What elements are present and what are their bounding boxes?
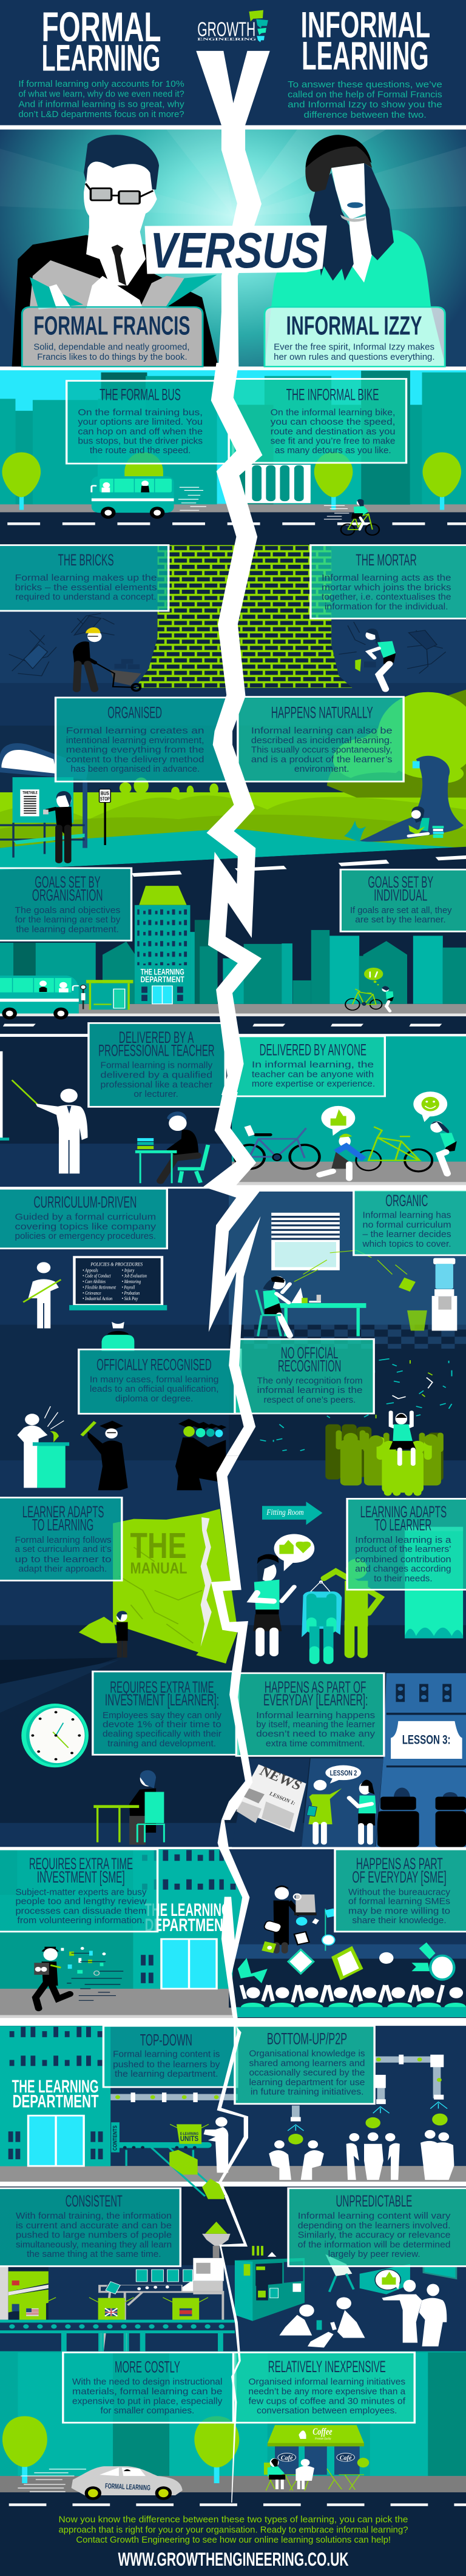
- panel: curriculum-driven: [0, 1189, 167, 1249]
- the learning department building: DEPARTMENT: [141, 975, 184, 985]
- lesson 3 cinema: [376, 1673, 466, 1847]
- panel: curriculum-driven: policies or emergency procedures.: [15, 1231, 156, 1241]
- panel: bottom-up P2P: Organisational knowledge is: [249, 2048, 365, 2058]
- running expert: [34, 1947, 123, 2008]
- panel: requires extra time investment SME: people too and lengthy review: [15, 1896, 147, 1906]
- panel: bottom-up P2P: shared among learners and: [249, 2058, 365, 2068]
- the manual rock: THE: [130, 1526, 187, 1566]
- panel: happens as part of everyday learner: [236, 1673, 384, 1756]
- intro text right: and Informal Izzy to show you the: [288, 99, 442, 110]
- learner at desk: [93, 1770, 164, 1845]
- closing text: Now you know the difference between these two types of learning, you can pick the: [58, 2515, 408, 2524]
- confetti: [260, 1359, 451, 1451]
- panel: the informal bike: see fit and you’re free to make: [271, 436, 395, 446]
- panel: learner adapts to learning: TO LEARNING: [32, 1516, 93, 1534]
- closing text: approach that is right for you or your organisation. Ready to embrace informal learning?: [58, 2525, 408, 2535]
- panel: relatively inexpensive: needn’t be any more expensive than a: [248, 2386, 406, 2396]
- panel: requires extra time investment SME: from volunteering information.: [17, 1915, 145, 1926]
- panel: more costly: expensive to put in place, especially: [72, 2396, 223, 2406]
- panel: organised: has been organised in advance.: [71, 764, 200, 774]
- panel: goals set by organisation: the learning department.: [16, 924, 119, 934]
- intro text left: And if informal learning is so great, why: [18, 99, 184, 109]
- teacher with pointer and blackboard: • Code of Conduct: [83, 1273, 111, 1278]
- panel: happens naturally: [238, 697, 404, 781]
- panel: requires extra time investment learner: Employees say they can only: [103, 1710, 221, 1720]
- toy shelf: [235, 2246, 305, 2321]
- panel: delivered by anyone: [235, 1036, 385, 1096]
- formal learning car: FORMAL LEARNING: [105, 2482, 150, 2492]
- panel: learning adapts to learner: Informal learning is a: [355, 1535, 451, 1545]
- panel: consistent: is current and accurate and can be: [16, 2220, 172, 2231]
- teacher with pointer and blackboard: • Probation: [122, 1290, 140, 1296]
- panel: relatively inexpensive: [233, 2352, 414, 2423]
- stock shelves: [0, 2267, 49, 2320]
- panel: the formal bus: On the formal training bus,: [78, 407, 203, 417]
- panel: Formal Francis: FORMAL FRANCIS: [33, 311, 190, 340]
- panel: requires extra time investment SME: Subject-matter experts are busy: [15, 1887, 147, 1897]
- conveyor e-learning units: E-LEARNING: [180, 2132, 198, 2136]
- conveyor e-learning units: CONTENTS: [112, 2125, 118, 2151]
- panel: organic: Informal learning has: [363, 1210, 451, 1220]
- logo: Growth Engineering: [197, 10, 268, 42]
- peers in discussion: [279, 2270, 447, 2348]
- bus shelter and bus: [0, 976, 133, 1019]
- panel: Formal Francis: Francis likes to do things by the book.: [37, 352, 187, 362]
- worker with wheelbarrow: [73, 627, 141, 691]
- peers sharing knowledge: [269, 2102, 454, 2180]
- panel: officially recognised: OFFICIALLY RECOGNISED: [96, 1357, 212, 1374]
- bike rider: [324, 499, 379, 535]
- panel: the mortar: information for the individual.: [325, 601, 448, 612]
- teacher with pointer and blackboard: • Payroll: [122, 1285, 135, 1290]
- panel: officially recognised: [79, 1349, 241, 1414]
- panel: relatively inexpensive: few cups of coffee and 30 minutes of: [248, 2396, 405, 2406]
- panel: learner adapts to learning: up to the learner to: [15, 1554, 112, 1564]
- seated audience: [241, 1985, 466, 2007]
- lesson 2 room: LESSON 2: [330, 1769, 357, 1777]
- panel: learner adapts to learning: LEARNER ADAPTS: [22, 1503, 104, 1521]
- panel: delivered by a professional teacher: [89, 1023, 225, 1107]
- intro text right: [288, 79, 442, 120]
- panel: organised: ORGANISED: [107, 704, 162, 722]
- intro text right: called on the help of Formal Francis: [288, 89, 442, 99]
- panel: happens as part of everyday learner: doesn’t need to make any: [256, 1728, 376, 1739]
- title: Formal Learning: FORMAL: [42, 4, 161, 50]
- newspaper: [235, 1764, 306, 1832]
- panel: Informal Izzy: [265, 307, 445, 366]
- panel: consistent: simultaneously, meaning they all learn: [16, 2239, 172, 2250]
- panel: happens as part of everyday SME: share their knowledge.: [352, 1915, 447, 1926]
- panel: more costly: With the need to design instructional: [72, 2376, 222, 2387]
- panel: Formal Francis: [22, 307, 203, 366]
- panel: happens naturally: and is a product of the learner’s: [251, 754, 393, 764]
- panel: the informal bike: you can choose the speed,: [271, 417, 395, 427]
- panel: top-down: [103, 2026, 237, 2087]
- panel: happens as part of everyday SME: may be more willing to: [348, 1906, 450, 1916]
- panel: goals set by organisation: for the learning are set by: [15, 914, 121, 925]
- teacher with pointer and blackboard: • Job Evaluation: [122, 1273, 147, 1278]
- person mending bike: [345, 968, 394, 1011]
- fitting room arrow: Fitting Room: [266, 1508, 304, 1517]
- coffee shop: Café: [281, 2454, 293, 2461]
- section: consistent, costs, footer: [0, 2188, 466, 2570]
- panel: learner adapts to learning: [0, 1497, 122, 1580]
- closing text: Contact Growth Engineering to see how our online learning solutions can help!: [76, 2535, 391, 2545]
- panel: delivered by anyone: In informal learning, the: [252, 1059, 374, 1070]
- panel: learner adapts to learning: a set curriculum and it’s: [15, 1544, 112, 1554]
- panel: unpredictable: largely by peer review.: [328, 2249, 420, 2259]
- panel: the informal bike: route and destination as you: [271, 427, 395, 437]
- panel: the bricks: required to understand a concept.: [15, 592, 157, 602]
- panel: no official recognition: NO OFFICIAL: [281, 1344, 338, 1362]
- mannequin and clothes: [302, 1559, 380, 1660]
- panel: goals set by organisation: GOALS SET BY: [35, 874, 101, 891]
- panel: goals set by organisation: [0, 868, 131, 940]
- illustration: Formal Francis: [12, 135, 218, 366]
- the manual rock: MANUAL: [130, 1560, 187, 1577]
- panel: requires extra time investment learner: dealing specifically with their: [103, 1728, 221, 1739]
- panel: delivered by anyone: teacher can be anyone with: [252, 1069, 374, 1079]
- panel: organised: content to the delivery method: [66, 754, 204, 764]
- central crack: [196, 51, 270, 2503]
- panel: consistent: CONSISTENT: [66, 2192, 123, 2210]
- road markings: [7, 521, 466, 527]
- section: organised, goals: [0, 690, 466, 1027]
- panel: more costly: MORE COSTLY: [115, 2358, 180, 2376]
- panel: delivered by a professional teacher: Formal learning is normally: [101, 1060, 213, 1070]
- wall cracks: [9, 613, 446, 676]
- panel: relatively inexpensive: Organised informal learning initiatives: [248, 2376, 405, 2387]
- panel: unpredictable: [288, 2188, 466, 2266]
- title: Informal Learning: [301, 5, 430, 78]
- fitting room curtain: [405, 1527, 463, 1639]
- trees: [2, 453, 461, 510]
- panel: organic: [354, 1190, 466, 1255]
- panel: no official recognition: The only recognition from: [257, 1375, 363, 1386]
- panel: delivered by a professional teacher: professional like a teacher: [101, 1079, 213, 1090]
- office room: [256, 1213, 457, 1337]
- panel: happens naturally: Informal learning can also be: [251, 726, 393, 736]
- newspaper: NEWS: [257, 1764, 305, 1793]
- panel: organic: no formal curriculum: [363, 1219, 451, 1230]
- panel: learner adapts to learning: Formal learning follows: [15, 1535, 112, 1545]
- panel: goals set by organisation: ORGANISATION: [32, 887, 103, 905]
- panel: bottom-up P2P: learning department for use: [249, 2077, 365, 2087]
- panel: requires extra time investment learner: devote 1% of their time to: [103, 1719, 221, 1729]
- intro text left: If formal learning only accounts for 10%: [18, 79, 184, 89]
- learning department building lower: THE LEARNING: [12, 2076, 99, 2097]
- teacher with pointer and blackboard: • Sick Pay: [122, 1296, 138, 1301]
- panel: requires extra time investment SME: REQUIRES EXTRA TIME: [29, 1855, 133, 1873]
- formal learning car: [72, 2466, 183, 2500]
- whiteboard corner: [325, 2254, 456, 2294]
- panel: bottom-up P2P: in future training initiatives.: [251, 2086, 364, 2097]
- panel: the formal bus: THE FORMAL BUS: [100, 386, 181, 404]
- Izzy with speech bubble: [252, 1534, 314, 1653]
- learning department building upper: THE LEARNING: [145, 1900, 231, 1920]
- ground and road: [0, 828, 466, 944]
- the learning department building: THE LEARNING: [141, 967, 184, 977]
- teacher with pointer and blackboard: • Industrial Action: [83, 1296, 113, 1301]
- production line machine: [100, 2222, 231, 2351]
- panel: the bricks: Formal learning makes up the: [15, 573, 157, 583]
- panel: Formal Francis: Solid, dependable and neatly groomed,: [33, 342, 189, 352]
- panel: the informal bike: as many detours as you like.: [275, 445, 391, 456]
- intro text right: To answer these questions, we’ve: [288, 79, 442, 89]
- panel: learning adapts to learner: [347, 1499, 466, 1590]
- panel: requires extra time investment learner: training and development.: [107, 1738, 216, 1748]
- student at desk: [135, 1111, 208, 1183]
- city buildings: [0, 371, 466, 505]
- newspaper: LESSON 1:: [268, 1791, 297, 1807]
- panel: bottom-up P2P: occasionally secured by the: [249, 2068, 365, 2078]
- panel: happens naturally: environment.: [294, 764, 350, 774]
- bus stop and commuter: STOP: [100, 796, 110, 802]
- panel: consistent: With formal training, the information: [16, 2211, 172, 2221]
- section: header and hero: [12, 4, 446, 367]
- bus stop and commuter: BUS: [101, 791, 109, 797]
- closing text: [58, 2515, 408, 2545]
- panel: more costly: materials, formal learning can be: [72, 2386, 222, 2396]
- teacher with pointer and blackboard: • Injury: [122, 1267, 134, 1273]
- versus badge: [145, 221, 327, 278]
- panel: the mortar: Informal learning acts as the: [322, 573, 451, 583]
- illustration: Informal Izzy: [265, 135, 446, 367]
- panel: consistent: pushed to large numbers of people: [16, 2230, 172, 2240]
- versus badge: VERSUS: [150, 221, 320, 278]
- panel: the formal bus: can hop on and off when the: [78, 427, 203, 437]
- teacher and blackboard: [0, 1051, 87, 1173]
- panel: the formal bus: bus stops, but the driver picks: [78, 436, 203, 446]
- coffee shop: Premium Quality: [315, 2437, 331, 2441]
- panel: relatively inexpensive: conversation between employees.: [257, 2406, 397, 2416]
- panel: delivered by a professional teacher: delivered by a qualified: [101, 1070, 212, 1080]
- learning department building lower: DEPARTMENT: [13, 2091, 99, 2111]
- panel: the informal bike: [229, 379, 407, 463]
- section: delivered panels: [89, 1023, 385, 1107]
- panel: the formal bus: [67, 381, 233, 464]
- panel: the bricks: THE BRICKS: [58, 551, 114, 569]
- panel: learning adapts to learner: combined contribution: [355, 1554, 451, 1564]
- panel: organised: meaning everything from the: [66, 744, 204, 755]
- logo: Growth Engineering: ENGINEERING: [197, 36, 256, 41]
- intro text right: difference between the two.: [304, 110, 427, 120]
- lesson 2 room: [232, 1758, 383, 1847]
- panel: goals set by individual: [340, 869, 466, 931]
- conveyor e-learning units: [111, 2117, 228, 2199]
- panel: learner adapts to learning: adapt their approach.: [18, 1563, 107, 1574]
- fitting room arrow: [262, 1502, 322, 1525]
- coffee shop: [264, 2425, 369, 2490]
- crowd heads and surfer: [343, 1412, 438, 1464]
- panel: unpredictable: Informal learning content will vary: [298, 2211, 451, 2221]
- bus stop and commuter: TIMETABLE: [22, 791, 38, 795]
- panel: the informal bike: On the informal learning bike,: [271, 407, 395, 417]
- intro text left: of what we learn, why do we even need it?: [18, 89, 184, 99]
- panel: no official recognition: RECOGNITION: [278, 1358, 341, 1375]
- brick wall: [135, 545, 352, 688]
- panel: learning adapts to learner: to their needs.: [374, 1573, 433, 1583]
- Izzy with trowel: [355, 629, 396, 689]
- panel: top-down: TOP-DOWN: [140, 2032, 192, 2049]
- teacher with pointer and blackboard: • Flexible Retirement: [83, 1285, 116, 1290]
- panel: curriculum-driven: Guided by a formal curriculum: [15, 1212, 156, 1222]
- panel: the formal bus: your options are limited. You: [78, 417, 203, 427]
- panel: no official recognition: informal learning is the: [257, 1385, 363, 1395]
- learning department building upper: [0, 1849, 242, 1989]
- panel: curriculum-driven: covering topics like company: [15, 1221, 157, 1232]
- panel: top-down: pushed to the learners by: [113, 2059, 220, 2069]
- teacher with pointer and blackboard: [23, 1257, 167, 1351]
- panel: more costly: for smaller companies.: [101, 2406, 194, 2416]
- bicycle workshop: [235, 1091, 457, 1178]
- conveyor e-learning units: UNITS: [180, 2134, 198, 2143]
- panel: the bricks: [0, 545, 169, 611]
- panel: organic: – the learner decides: [363, 1229, 451, 1239]
- tree and reader: [327, 690, 466, 842]
- section: SME and top-down: [0, 1849, 466, 2199]
- panel: consistent: the same thing at the same time.: [27, 2249, 161, 2259]
- panel: requires extra time investment SME: processes can dissuade them: [15, 1906, 146, 1916]
- title: Formal Learning: [42, 4, 161, 79]
- panel: delivered by a professional teacher: or lecturer.: [133, 1089, 178, 1099]
- panel: officially recognised: In many cases, formal learning: [90, 1374, 218, 1384]
- road markings lower: [3, 1024, 442, 1027]
- panel: the formal bus: the route and the speed.: [90, 445, 191, 456]
- teacher with pointer and blackboard: • Grievance: [83, 1290, 101, 1296]
- panel: delivered by a professional teacher: DELIVERED BY A: [119, 1029, 194, 1047]
- the learning department building: [135, 886, 190, 1004]
- panel: requires extra time investment learner: REQUIRES EXTRA TIME: [110, 1679, 214, 1696]
- wall clock: [21, 1704, 89, 1767]
- panel: delivered by anyone: more expertise or experience.: [252, 1079, 375, 1089]
- teacher with pointer and blackboard: • Core Abilities: [83, 1279, 106, 1284]
- park bushes: [0, 777, 466, 848]
- pipes: [110, 2055, 444, 2122]
- panel: consistent: [0, 2188, 180, 2266]
- street trees: [2, 2416, 239, 2492]
- panel: top-down: Formal learning content is: [113, 2049, 220, 2059]
- intro text left: don’t L&D departments focus on it more?: [18, 109, 184, 120]
- panel: happens naturally: This usually occurs spontaneously,: [251, 744, 393, 755]
- panel: happens as part of everyday SME: [335, 1849, 466, 1932]
- panel: organised: Formal learning creates an: [66, 726, 204, 736]
- teacher with pointer and blackboard: POLICIES & PROCEDURES: [90, 1261, 143, 1267]
- bus stop and commuter: [0, 743, 110, 860]
- panel: bottom-up P2P: [235, 2026, 374, 2104]
- panel: bottom-up P2P: BOTTOM-UP/P2P: [267, 2031, 347, 2048]
- panel: organised: [56, 698, 231, 781]
- section: bus and bike, bricks and mortar: [0, 371, 466, 691]
- panel: the mortar: mortar which joins the bricks: [322, 582, 451, 593]
- coffee shop: Café: [340, 2454, 352, 2461]
- panel: organised: intentional learning environment,: [66, 735, 204, 745]
- coffee shop: Coffee: [312, 2426, 333, 2437]
- section: header and hero: LEARNING: [42, 38, 160, 79]
- panel: requires extra time investment SME: [0, 1849, 158, 1932]
- the manual rock: [79, 1509, 238, 1664]
- learning department building lower: [0, 2026, 110, 2166]
- bus: [92, 476, 206, 519]
- panel: happens as part of everyday learner: by itself, meaning the learner: [256, 1719, 375, 1729]
- panel: requires extra time investment learner: [93, 1671, 238, 1755]
- graduation: [17, 1406, 226, 1490]
- logo: Growth Engineering: GROWTH: [197, 18, 255, 40]
- learning department building upper: DEPARTMENT: [145, 1915, 231, 1935]
- panel: happens as part of everyday SME: of formal learning SMEs: [348, 1896, 450, 1906]
- panel: requires extra time investment learner: INVESTMENT [LEARNER]:: [105, 1691, 219, 1709]
- intro text left: [18, 79, 184, 120]
- conveyor belt with flag boxes: [0, 2298, 235, 2351]
- panel: happens as part of everyday learner: Informal learning happens: [256, 1710, 375, 1720]
- panel: happens as part of everyday learner: extra time commitment.: [266, 1738, 365, 1748]
- panel: more costly: [63, 2352, 235, 2423]
- skyline: [0, 920, 466, 1004]
- panel: the bricks: bricks – the essential elements: [15, 582, 157, 593]
- panel: no official recognition: respect of one’s peers.: [263, 1395, 356, 1405]
- panel: top-down: the learning department.: [115, 2069, 218, 2079]
- cheering crowd: [325, 1425, 444, 1492]
- section: adapts, extra time for learner: [0, 1497, 466, 1847]
- panel: requires extra time investment SME: INVESTMENT [SME]: [37, 1869, 125, 1886]
- panel: officially recognised: leads to an official qualification,: [90, 1384, 218, 1394]
- panel: goals set by organisation: The goals and objectives: [15, 905, 120, 915]
- panel: the mortar: [311, 545, 466, 619]
- teacher with pointer and blackboard: • Appeals: [83, 1267, 98, 1273]
- panel: happens naturally: described as incidental learning.: [251, 735, 393, 745]
- section: delivered panels: PROFESSIONAL TEACHER: [98, 1042, 215, 1060]
- panel: curriculum-driven: CURRICULUM-DRIVEN: [33, 1193, 137, 1212]
- teacher with pointer and blackboard: • Mentoring: [122, 1279, 141, 1284]
- panel: goals set by individual: are set by the learner.: [355, 914, 446, 925]
- panel: officially recognised: diploma or degree.: [115, 1394, 193, 1404]
- panel: no official recognition: [235, 1339, 374, 1414]
- section: teachers, curriculum, recognition: [0, 1051, 466, 1492]
- floating SME knowledge items: [238, 1886, 454, 1983]
